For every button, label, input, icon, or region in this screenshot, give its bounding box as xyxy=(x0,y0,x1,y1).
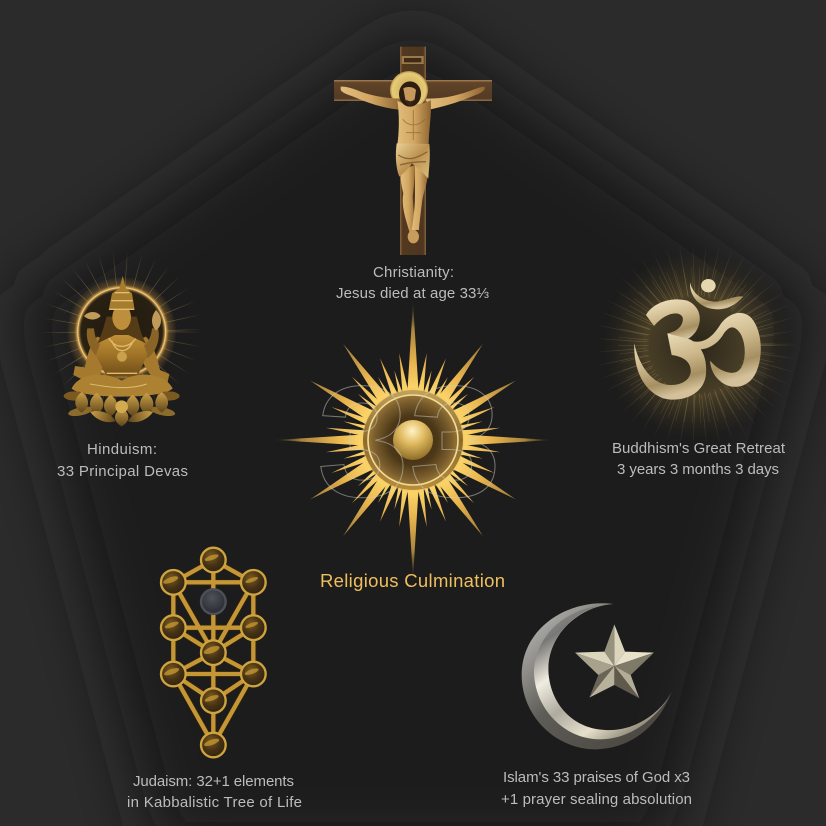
label: Christianity: Jesus died at age 33⅓ xyxy=(336,285,489,302)
label: Islam: +1 prayer sealing absolution xyxy=(501,791,692,808)
icon: crucifix xyxy=(334,47,492,255)
heading: Religious Culmination: Religious Culmination xyxy=(320,570,505,591)
icon: crescent and star xyxy=(522,603,672,749)
label: Hinduism xyxy=(57,441,188,480)
icon: Om symbol xyxy=(603,252,790,438)
label: Buddhism: Buddhism's Great Retreat xyxy=(612,440,786,457)
label: Judaism: in Kabbalistic Tree of Life xyxy=(127,794,302,811)
label: Christianity xyxy=(336,264,489,302)
label: Buddhism: 3 years 3 months 3 days xyxy=(617,461,779,478)
label: Judaism xyxy=(127,773,302,811)
icon: central sun with 33 outline xyxy=(275,302,551,578)
label: Judaism: Judaism: 32+1 elements xyxy=(133,773,294,790)
label: Islam xyxy=(501,769,692,808)
label: Buddhism xyxy=(612,440,786,478)
label: Hinduism: Hinduism: xyxy=(87,441,157,458)
label: Islam: Islam's 33 praises of God x3 xyxy=(503,769,690,786)
icon: central sun with 33 outline: 33 xyxy=(317,354,501,530)
icon: Kabbalistic Tree of Life xyxy=(161,548,266,757)
icon: Hindu deity xyxy=(60,270,183,426)
label: Christianity: Christianity: xyxy=(373,264,454,281)
label: Hinduism: 33 Principal Devas xyxy=(57,463,188,480)
